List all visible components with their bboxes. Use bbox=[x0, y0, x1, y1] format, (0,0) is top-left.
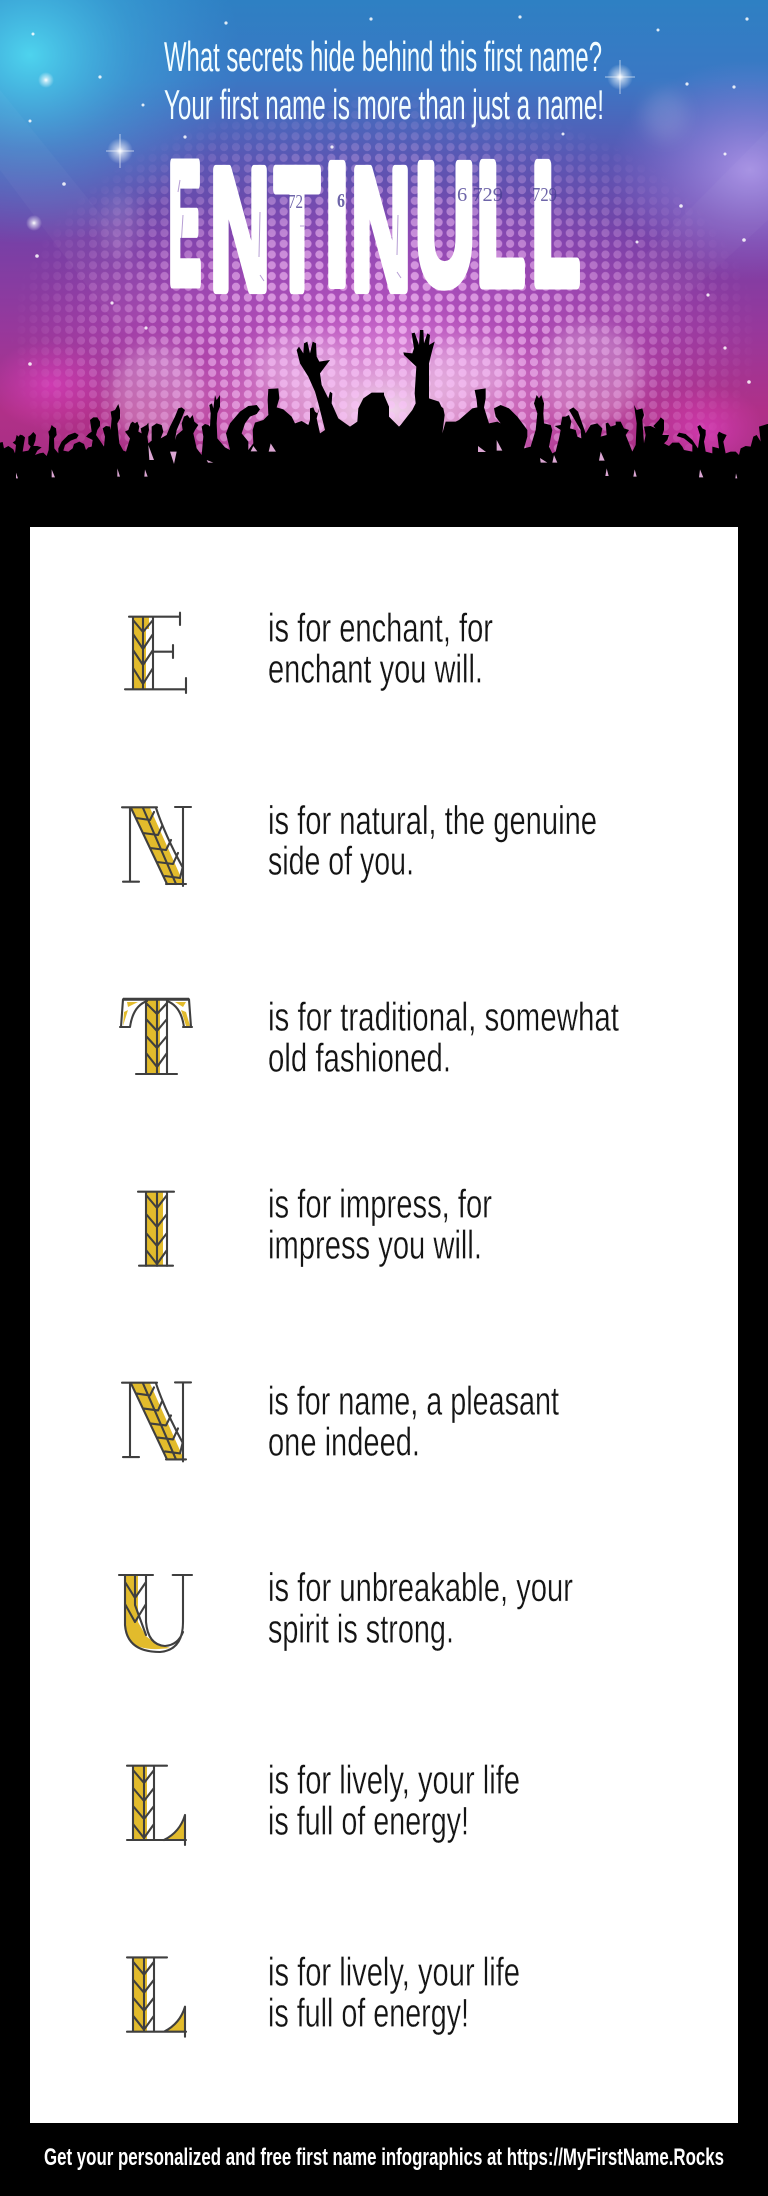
text: N line bbox=[268, 799, 597, 883]
distressed numerals on the name: 6 729 bbox=[457, 184, 503, 206]
name title: ENTINULL: U bbox=[415, 127, 475, 321]
text: E line: enchant you will. bbox=[268, 648, 483, 692]
text: L line: is for lively, your life bbox=[268, 1951, 520, 1995]
icon: letter N bbox=[122, 807, 191, 886]
text: N line: is for name, a pleasant bbox=[268, 1379, 559, 1423]
distressed numerals on the name: 72 bbox=[288, 191, 303, 213]
crowd silhouette bbox=[0, 330, 768, 527]
name title: ENTINULL: L bbox=[477, 130, 524, 320]
icon: letter L bbox=[127, 1766, 186, 1845]
text: T line bbox=[268, 996, 619, 1081]
text: T line: is for traditional, somewhat bbox=[268, 996, 619, 1040]
text: U line: spirit is strong. bbox=[268, 1607, 454, 1651]
icon: letter N bbox=[122, 1382, 191, 1461]
distressed numerals on the name: 729 bbox=[532, 184, 557, 206]
icon: letter U bbox=[119, 1575, 192, 1652]
name title: ENTINULL: E bbox=[168, 127, 201, 320]
text: E line: is for enchant, for bbox=[268, 607, 493, 651]
text: N line: is for natural, the genuine bbox=[268, 799, 597, 843]
text: N line bbox=[268, 1379, 559, 1465]
name title: ENTINULL: N bbox=[210, 132, 270, 326]
text: L line bbox=[268, 1951, 520, 2036]
panel: white content card bbox=[30, 527, 738, 2123]
text: U line bbox=[268, 1566, 573, 1651]
icon: letter L bbox=[127, 1957, 186, 2037]
heading lines bbox=[164, 33, 604, 128]
header: concert background bbox=[0, 0, 768, 456]
name title: ENTINULL: I bbox=[325, 127, 349, 321]
text: L line: is for lively, your life bbox=[268, 1758, 520, 1802]
icon: letter T bbox=[120, 999, 192, 1074]
icon: letter E bbox=[125, 613, 186, 693]
text: T line: old fashioned. bbox=[268, 1037, 451, 1081]
text: U line: is for unbreakable, your bbox=[268, 1566, 573, 1610]
sparkles bbox=[26, 15, 751, 384]
distressed numerals on the name: 6 bbox=[337, 190, 345, 212]
name title: ENTINULL: N bbox=[351, 132, 411, 326]
text: I line bbox=[268, 1182, 492, 1267]
text: I line: impress you will. bbox=[268, 1223, 482, 1267]
halftone dot field bbox=[34, 102, 734, 452]
name title: ENTINULL: T bbox=[274, 134, 320, 327]
name title: ENTINULL: L bbox=[532, 130, 579, 320]
name title: ENTINULL bbox=[168, 127, 579, 327]
text: I line: is for impress, for bbox=[268, 1182, 492, 1226]
text: L line: is full of energy! bbox=[268, 1992, 469, 2036]
text: L line: is full of energy! bbox=[268, 1799, 469, 1843]
text: L line bbox=[268, 1758, 520, 1843]
distressed numerals on the name bbox=[288, 184, 557, 213]
text: E line bbox=[268, 607, 493, 692]
icon: letter I bbox=[138, 1192, 174, 1266]
text: N line: one indeed. bbox=[268, 1421, 420, 1465]
text: N line: side of you. bbox=[268, 839, 414, 883]
